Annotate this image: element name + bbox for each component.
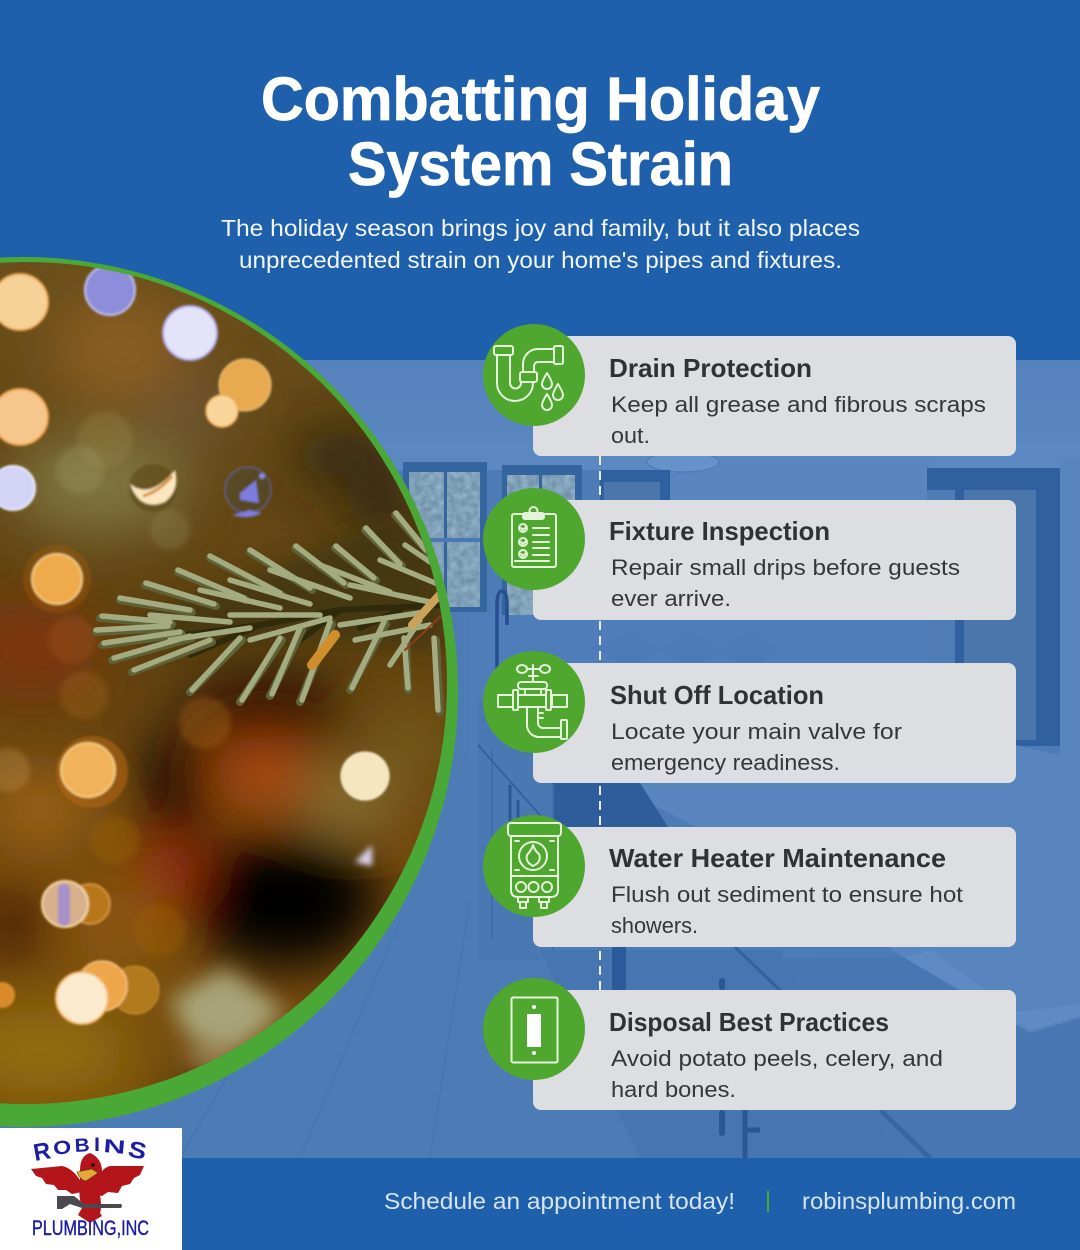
- title: System Strain: [348, 130, 733, 198]
- text: disposal best practices: hard bones.: [611, 1077, 736, 1102]
- text: water heater maintenance: [611, 882, 963, 938]
- text: drain protection: Keep all grease and fibrous scraps: [611, 392, 986, 417]
- panel: water heater maintenance: [533, 827, 1016, 947]
- footer website: robinsplumbing.com: [802, 1188, 1016, 1214]
- subtitle: unprecedented strain on your home's pipes and fixtures.: [239, 247, 842, 273]
- panel: drain protection: [533, 336, 1016, 456]
- heading: drain protection: Drain Protection: [609, 353, 812, 383]
- icon: shut off valve: [483, 651, 585, 753]
- heading: fixture inspection: Fixture Inspection: [609, 516, 830, 546]
- wall tile band: [670, 620, 927, 630]
- text: fixture inspection: ever arrive.: [611, 586, 731, 611]
- logo wordmark top: R: [31, 1137, 53, 1167]
- green circle ring: [0, 257, 458, 1127]
- icon: disposal switch: [483, 978, 585, 1080]
- logo bird mascot: [31, 1153, 144, 1223]
- text: shut off location: emergency readiness.: [611, 750, 840, 775]
- logo wordmark top: O: [52, 1137, 72, 1160]
- branch stems: [130, 605, 445, 655]
- logo wordmark top: N: [103, 1136, 126, 1159]
- window three: [600, 470, 670, 500]
- text: shut off location: [611, 719, 902, 775]
- text: shut off location: Locate your main valve for: [611, 719, 902, 744]
- blurred lower branch: [170, 968, 285, 1064]
- lower cabinets: [612, 947, 932, 1158]
- lamp: [646, 456, 720, 472]
- title: [261, 65, 820, 198]
- window one: [403, 462, 487, 612]
- logo: robins plumbing: [0, 1128, 182, 1250]
- text: water heater maintenance: showers.: [611, 913, 698, 938]
- branch needles light layer: [96, 513, 445, 710]
- logo wordmark top: B: [74, 1135, 90, 1157]
- subtitle: The holiday season brings joy and family, but it also places: [221, 215, 860, 241]
- footer bar: [0, 1158, 1080, 1250]
- soft background colour blobs: [0, 295, 450, 1106]
- text: disposal best practices: [611, 1046, 943, 1102]
- logo wordmark top: I: [94, 1135, 100, 1156]
- text: fixture inspection: Repair small drips before guests: [611, 555, 960, 580]
- text: disposal best practices: Avoid potato peels, celery, and: [611, 1046, 943, 1071]
- background photo: blue tinted kitchen: [0, 360, 1080, 1158]
- logo wordmark bottom: PLUMBING,INC: [32, 1217, 149, 1240]
- panel: disposal best practices: [533, 990, 1016, 1110]
- heading: shut off location: Shut Off Location: [610, 680, 824, 710]
- faucet: [497, 591, 507, 690]
- panel: shut off location: [533, 663, 1016, 783]
- logo wordmark top: [31, 1135, 149, 1167]
- logo wordmark top: S: [126, 1135, 149, 1165]
- photo: christmas tree bokeh: [0, 250, 460, 1120]
- right dark doorway: [927, 460, 1080, 760]
- panel: fixture inspection: [533, 500, 1016, 620]
- heading: disposal best practices: Disposal Best Practices: [609, 1007, 889, 1037]
- counter and island: [610, 745, 1080, 1033]
- heading: water heater maintenance: Water Heater Maintenance: [609, 843, 946, 873]
- pine branch: [96, 513, 445, 712]
- text: drain protection: [611, 392, 986, 448]
- title: Combatting Holiday: [261, 65, 820, 133]
- dashed connector line: [599, 456, 601, 990]
- footer divider: [767, 1191, 769, 1212]
- icon: leaking pipe: [483, 324, 585, 426]
- window two: [502, 465, 582, 615]
- left cabinets: [478, 744, 554, 950]
- floor boards: [180, 900, 470, 1158]
- footer call to action: Schedule an appointment today!: [384, 1188, 735, 1214]
- lower ornament reflection: [355, 845, 372, 866]
- bubble ornament reflection: [225, 467, 271, 517]
- text: fixture inspection: [611, 555, 960, 611]
- icon: clipboard checklist: [483, 488, 585, 590]
- branch needles dark layer: [96, 515, 440, 712]
- subtitle: [221, 215, 860, 273]
- text: drain protection: out.: [611, 423, 650, 448]
- icon: water heater: [483, 815, 585, 917]
- text: water heater maintenance: Flush out sediment to ensure hot: [611, 882, 963, 907]
- oven: [552, 783, 668, 827]
- bright bokeh lights: [0, 265, 389, 1024]
- glass ornament reflection: [129, 464, 177, 512]
- dim bokeh circles: [0, 412, 231, 956]
- golden branch accents: [312, 635, 335, 665]
- branch shadow mass: [130, 525, 445, 650]
